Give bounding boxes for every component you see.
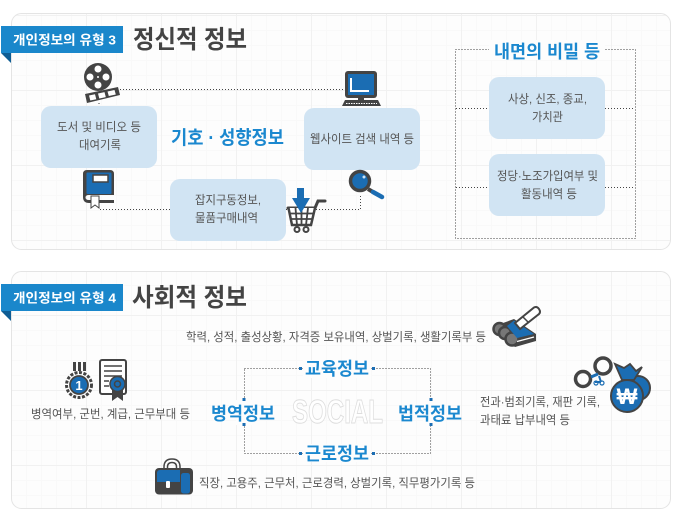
- text: legal details: [480, 395, 600, 427]
- box: website search history: [304, 108, 420, 170]
- badge: type 3: [1, 26, 123, 63]
- icon: notebook and pencil: [494, 307, 540, 347]
- badge: type 4: [1, 284, 123, 321]
- panel: mental information: [1, 14, 670, 250]
- box: books and video rental: 대여기록: [79, 138, 121, 152]
- box: magazine and purchases: 물품구매내역: [195, 211, 258, 225]
- icon: medal and certificate: [66, 360, 126, 401]
- heading: inner secrets: 내면의 비밀 등: [494, 42, 600, 62]
- text: education details: 학력, 성적, 출성상황, 자격증 보유내역, 상벌기록, 생활기록부 등: [186, 330, 486, 344]
- heading: hobby information: 기호 · 성향정보: [171, 127, 284, 149]
- text: labor details: 직장, 고용주, 근무처, 근로경력, 상벌기록, 직무평가기록 등: [199, 476, 475, 490]
- box: party and union: [489, 154, 605, 216]
- icon: film reel: [84, 63, 120, 103]
- label: legal: 법적정보: [398, 404, 462, 424]
- text: military details: 병역여부, 군번, 계급, 근무부대 등: [31, 407, 190, 421]
- panel: social information: [1, 272, 670, 508]
- box: books and video rental: 도서 및 비디오 등: [57, 120, 141, 134]
- watermark: SOCIAL: SOCIAL: [292, 393, 383, 430]
- icon: medal and certificate: 1: [75, 378, 83, 393]
- label: labor: 근로정보: [305, 444, 369, 464]
- badge: type 3: 개인정보의 유형 3: [13, 32, 116, 48]
- text: legal details: 전과·범죄기록, 재판 기록,: [480, 395, 600, 409]
- box: thought and religion: 가치관: [532, 110, 563, 124]
- icon: computer: [342, 71, 381, 106]
- box: thought and religion: 사상, 신조, 종교,: [508, 92, 587, 106]
- box: magazine and purchases: 잡지구동정보,: [195, 193, 261, 207]
- heading: social information: 사회적 정보: [132, 284, 247, 312]
- box: party and union: 활동내역 등: [521, 187, 577, 201]
- text: legal details: 과태료 납부내역 등: [480, 413, 570, 427]
- group: inner secrets: [456, 40, 636, 238]
- icon: book: [83, 170, 114, 208]
- icon: handcuffs and money bags: [576, 358, 650, 412]
- heading: mental information: 정신적 정보: [133, 26, 247, 54]
- icon: shopping cart: [288, 188, 325, 232]
- diagram: information categories: [211, 359, 462, 464]
- icon: briefcase: [155, 459, 193, 494]
- connector lines: hobby group: [99, 90, 360, 210]
- box: magazine and purchases: [170, 179, 286, 241]
- icon: magnifier: [350, 172, 382, 197]
- label: military: 병역정보: [211, 404, 275, 424]
- box: party and union: 정당·노조가입여부 및: [497, 169, 598, 183]
- box: books and video rental: [41, 106, 157, 168]
- box: thought and religion: [489, 77, 605, 139]
- badge: type 4: 개인정보의 유형 4: [13, 290, 117, 306]
- box: website search history: 웹사이트 검색 내역 등: [310, 132, 414, 146]
- icon: handcuffs and money bags: ₩: [617, 384, 638, 409]
- label: education: 교육정보: [305, 359, 369, 379]
